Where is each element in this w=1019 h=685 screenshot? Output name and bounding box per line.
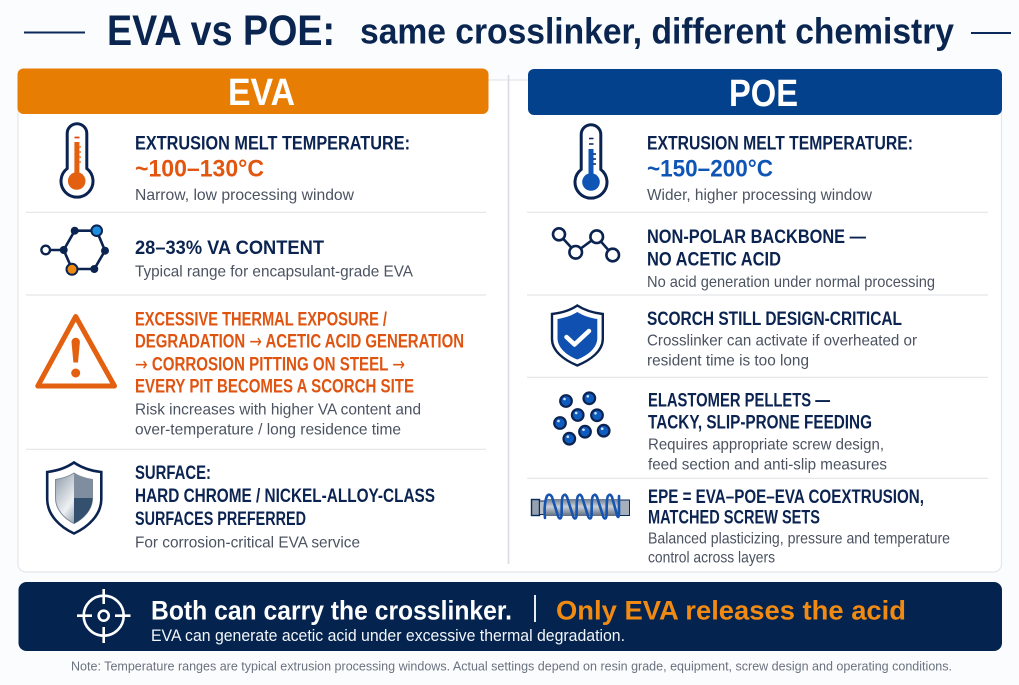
POE scorch text [647, 309, 918, 370]
POE coextrusion text [648, 487, 950, 566]
POE coextrusion text: Balanced plasticizing, pressure and temperature [648, 530, 950, 547]
banner subtext: EVA can generate acetic acid under excessive thermal degradation. [151, 627, 625, 645]
title [24, 7, 1011, 55]
EVA degradation warning text: EXCESSIVE THERMAL EXPOSURE / [135, 310, 388, 331]
icon: EVA ring molecule [41, 225, 109, 275]
icon: crosshair target [77, 589, 130, 643]
POE pellets text: ELASTOMER PELLETS — [648, 391, 830, 412]
footnote: Note: Temperature ranges are typical extrusion processing windows. Actual settings depend on resin grade, equipment, screw design and operating conditions. [71, 659, 952, 674]
POE header [528, 69, 1002, 115]
POE backbone text: NON-POLAR BACKBONE — [647, 227, 866, 248]
panel: POE [527, 69, 1002, 566]
banner headline: Only EVA releases the acid [556, 595, 906, 625]
POE melt temperature text: Wider, higher processing window [647, 187, 872, 204]
EVA surface text: For corrosion-critical EVA service [135, 534, 360, 551]
POE coextrusion text: EPE = EVA–POE–EVA COEXTRUSION, [648, 487, 924, 508]
POE pellets text: TACKY, SLIP-PRONE FEEDING [648, 412, 872, 433]
title: same crosslinker, different chemistry [360, 10, 954, 52]
POE coextrusion text: control across layers [648, 549, 775, 566]
icon: warning triangle [38, 316, 114, 386]
EVA surface text: HARD CHROME / NICKEL-ALLOY-CLASS [135, 486, 435, 507]
EVA degradation warning text [135, 310, 464, 438]
EVA degradation warning text: over-temperature / long residence time [135, 421, 401, 438]
EVA VA content text [135, 238, 413, 281]
EVA surface text [135, 463, 435, 551]
takeaway banner [18, 582, 1002, 651]
POE scorch text: SCORCH STILL DESIGN-CRITICAL [647, 309, 902, 330]
panel: EVA [18, 68, 488, 551]
icon: POE chain molecule [553, 228, 619, 261]
POE scorch text: Crosslinker can activate if overheated or [647, 333, 918, 350]
EVA degradation warning text: → CORROSION PITTING ON STEEL → [135, 353, 405, 375]
icon: extruder screw [532, 495, 630, 518]
EVA header: EVA [228, 72, 295, 114]
EVA degradation warning text: EVERY PIT BECOMES A SCORCH SITE [135, 377, 414, 398]
EVA melt temperature text [135, 134, 410, 204]
POE backbone text: NO ACETIC ACID [647, 250, 781, 271]
EVA VA content text: Typical range for encapsulant-grade EVA [135, 264, 413, 281]
icon: check shield [552, 306, 603, 366]
POE header: POE [729, 73, 798, 115]
icon: elastomer pellets [554, 392, 610, 445]
POE coextrusion text: MATCHED SCREW SETS [648, 507, 820, 528]
POE backbone text: No acid generation under normal processing [647, 274, 935, 291]
POE melt temperature text [647, 134, 913, 204]
POE scorch text: resident time is too long [647, 353, 809, 370]
EVA melt temperature text: ~100–130°C [135, 156, 264, 183]
title: EVA vs POE: [107, 7, 335, 55]
POE melt temperature text: EXTRUSION MELT TEMPERATURE: [647, 134, 913, 154]
banner headline: Both can carry the crosslinker. [151, 595, 512, 625]
EVA VA content text: 28–33% VA CONTENT [135, 238, 324, 259]
POE melt temperature text: ~150–200°C [647, 156, 773, 183]
EVA melt temperature text: EXTRUSION MELT TEMPERATURE: [135, 134, 410, 154]
icon: EVA thermometer [61, 124, 93, 197]
icon: steel shield [47, 462, 101, 534]
POE pellets text: feed section and anti-slip measures [648, 457, 887, 474]
EVA degradation warning text: DEGRADATION → ACETIC ACID GENERATION [135, 331, 464, 353]
banner headline [151, 595, 906, 625]
POE pellets text: Requires appropriate screw design, [648, 437, 884, 454]
POE backbone text [647, 227, 935, 291]
icon: POE thermometer [575, 125, 607, 198]
EVA degradation warning text: Risk increases with higher VA content and [135, 401, 421, 418]
EVA header [18, 68, 488, 114]
POE pellets text [648, 391, 887, 474]
EVA surface text: SURFACE: [135, 463, 211, 484]
EVA surface text: SURFACES PREFERRED [135, 509, 306, 530]
EVA melt temperature text: Narrow, low processing window [135, 187, 354, 204]
